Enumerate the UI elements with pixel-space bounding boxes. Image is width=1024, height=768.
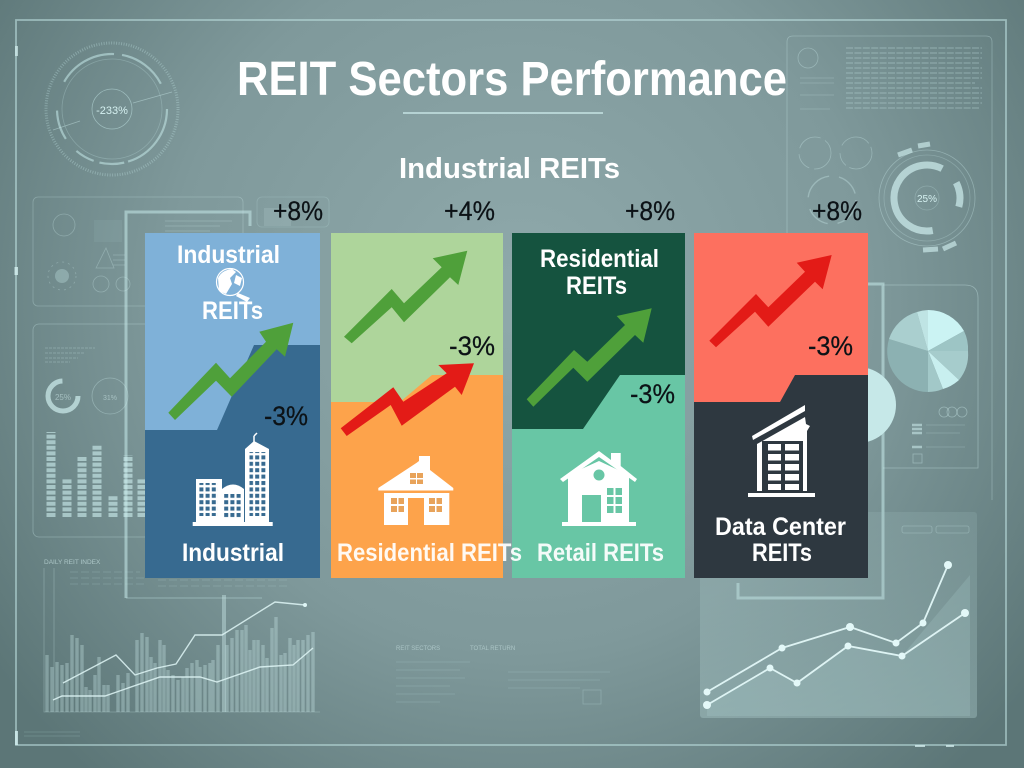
panel: industrial: REITs [202,297,263,325]
panel: data center: REITs [752,539,812,567]
panel: retail: Retail REITs [537,539,664,567]
percentage: residential gain: +4% [444,196,495,226]
background gauge: -233% [96,105,128,117]
percentage: industrial loss: -3% [264,401,308,431]
percentage: industrial gain: +8% [273,196,323,226]
subtitle: Industrial REITs [399,153,620,185]
arrow: red up [341,363,474,436]
background panel: left infographic box [33,197,329,306]
icon: globe and magnifier [216,268,250,302]
title: REIT Sectors Performance [237,53,787,106]
percentage: retail loss: -3% [630,379,675,409]
panel: retail: REITs [566,272,627,300]
arrow: red up [709,255,832,347]
percentage: data center gain: +8% [812,196,862,226]
arrow: green up [344,251,467,343]
icon: house [378,456,453,525]
arrow: green up [527,308,652,407]
background text block: bottom centre: REIT SECTORS [396,646,440,652]
panel: industrial [145,233,320,578]
arrow: green up [168,323,293,420]
panel: residential [331,233,503,578]
percentage: retail gain: +8% [625,196,675,226]
title underline [403,112,603,114]
background chart: bottom right line chart [700,512,977,747]
icon: city buildings [193,433,273,526]
background chart: bottom left bars and lines: DAILY REIT INDEX [44,559,101,566]
panel: industrial: Industrial [182,539,284,567]
background gauge [46,43,178,175]
panel: data center: Data Center [715,513,846,541]
background panel: left bar charts [33,324,243,537]
panel: data center [694,233,868,578]
label: residential REITs, overlapping the retail panel: Residential REITs [337,539,522,567]
background chart: bottom left bars and lines [24,559,320,736]
panel: retail: Residential [540,245,659,273]
percentage: residential loss: -3% [449,331,495,361]
panel: retail [512,233,685,578]
panel: industrial: Industrial [177,241,280,269]
background circle behind panels [820,367,896,443]
background panel: right gauges and text [787,36,992,500]
background panel: pie chart [883,285,978,468]
background panel: left bar charts: 31% [103,395,117,402]
background text block: bottom centre: TOTAL RETURN [470,646,515,652]
background panel: right gauges and text: 25% [917,194,937,205]
background text block: bottom centre [396,646,610,704]
icon: house outline [560,451,637,526]
percentage: data center loss: -3% [808,331,853,361]
icon: data center building [748,405,815,497]
background panel: left bar charts: 25% [55,393,71,402]
